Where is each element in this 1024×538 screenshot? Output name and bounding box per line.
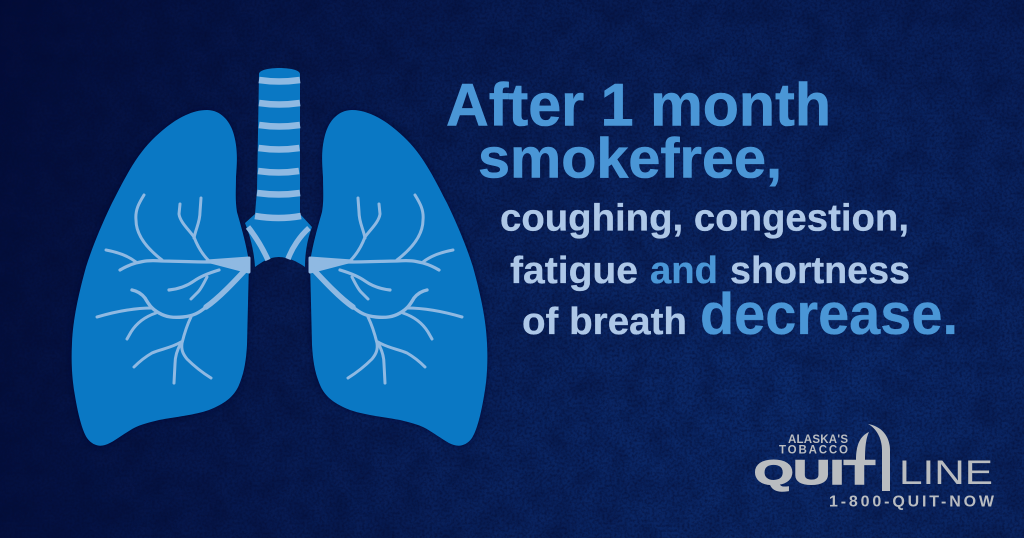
icon: right-side lung — [310, 110, 487, 446]
headline — [446, 72, 831, 190]
body text: of breath — [522, 301, 687, 343]
headline: smokefree, — [478, 126, 782, 190]
body text: decrease. — [700, 282, 958, 347]
headline: After 1 month — [446, 72, 831, 138]
logo: Alaska's Tobacco Quitline — [754, 424, 995, 510]
body text: and — [650, 250, 718, 292]
body text: coughing, congestion, — [500, 198, 909, 240]
logo: Alaska's Tobacco Quitline: 1-800-QUIT-NOW — [829, 494, 995, 510]
logo: Alaska's Tobacco Quitline: TOBACCO — [779, 444, 848, 456]
logo: Alaska's Tobacco Quitline: QUIT — [754, 454, 875, 492]
icon: left-side lung — [72, 110, 249, 446]
body text — [500, 198, 958, 347]
lung shadows — [72, 110, 487, 446]
body text: fatigue — [510, 250, 638, 292]
icon: trachea — [245, 68, 312, 267]
logo: Alaska's Tobacco Quitline: ALASKA'S — [788, 434, 848, 446]
icon: arch — [856, 424, 890, 491]
lung illustration — [72, 68, 487, 446]
body text: shortness — [730, 250, 910, 292]
logo: Alaska's Tobacco Quitline: LINE — [899, 454, 993, 492]
